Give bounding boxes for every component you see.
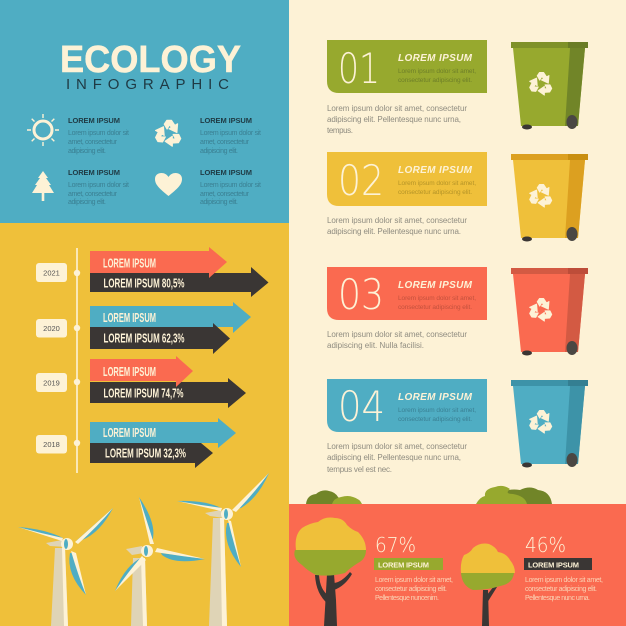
subtitle: INFOGRAPHIC — [66, 76, 229, 93]
paragraph 04: adipiscing elit. Pellentesque nunc urna, — [327, 453, 461, 462]
text block: recycle: amet, consectetur — [200, 139, 250, 146]
stat 67%: consectetur adipiscing elit. — [375, 586, 447, 593]
icon: tree — [32, 171, 54, 201]
bin green — [511, 42, 588, 130]
stat 67%: 67% — [375, 533, 416, 557]
banner 01: consectetur adipiscing elit. — [398, 77, 472, 84]
banner 01 — [327, 40, 487, 93]
paragraph 04: Lorem ipsum dolor sit amet, consectetur — [327, 442, 467, 451]
banner 04: Lorem ipsum dolor sit amet, — [398, 407, 476, 414]
arrows 2020: LOREM IPSUM — [103, 310, 156, 325]
text block: tree: amet, consectetur — [68, 191, 118, 198]
text block: sun: LOREM IPSUM — [68, 116, 120, 125]
bin yellow — [511, 154, 588, 242]
paragraph 01: Lorem ipsum dolor sit amet, consectetur — [327, 104, 467, 113]
stat 46%: 46% — [525, 533, 566, 557]
bin blue — [511, 380, 588, 468]
panel: yellow timeline background — [0, 223, 289, 626]
stat 67% — [374, 533, 453, 602]
year tag 2019: 2019 — [43, 378, 60, 388]
banner 01: 01 — [338, 44, 380, 93]
panel: cream background — [289, 0, 626, 504]
banner 02 — [327, 152, 487, 206]
wind turbine middle — [115, 497, 205, 626]
stat 46% — [524, 533, 603, 602]
paragraph 04: tempus vel est nec. — [327, 465, 392, 474]
arrows 2021 — [90, 247, 268, 297]
arrows 2020: LOREM IPSUM 62,3% — [104, 330, 185, 346]
title: ECOLOGY — [60, 39, 241, 81]
panel: red bottom — [289, 504, 626, 626]
stat 67%: LOREM IPSUM — [378, 560, 429, 570]
year tag 2020 — [36, 319, 67, 338]
arrows 2020 — [90, 302, 251, 354]
paragraph 01 — [327, 104, 467, 135]
text block: sun — [68, 116, 129, 155]
stat 67%: Lorem ipsum dolor sit amet, — [375, 577, 453, 584]
paragraph 02 — [327, 216, 467, 236]
year tag 2019 — [36, 373, 67, 392]
tree left — [294, 518, 366, 626]
timeline axis — [74, 248, 80, 473]
year tag 2020: 2020 — [43, 324, 60, 333]
banner 02: 02 — [338, 156, 384, 205]
stat 46%: consectetur adipiscing elit. — [525, 586, 597, 593]
banner 02: LOREM IPSUM — [398, 165, 473, 176]
text block: heart — [200, 168, 261, 206]
banner 02: consectetur adipiscing elit. — [398, 189, 472, 196]
wind turbine right — [177, 473, 269, 626]
paragraph 04 — [327, 442, 467, 474]
text block: heart: Lorem ipsum dolor sit — [200, 182, 261, 189]
stat 46%: Lorem ipsum dolor sit amet, — [525, 577, 603, 584]
banner 01: LOREM IPSUM — [398, 53, 473, 64]
paragraph 01: tempus. — [327, 126, 353, 135]
text block: recycle: Lorem ipsum dolor sit — [200, 130, 261, 137]
text block: sun: adipiscing elit. — [68, 148, 106, 155]
arrows 2019: LOREM IPSUM — [103, 364, 156, 379]
banner 03: Lorem ipsum dolor sit amet, — [398, 295, 476, 302]
text block: sun: Lorem ipsum dolor sit — [68, 130, 129, 137]
arrows 2019: LOREM IPSUM 74,7% — [104, 386, 184, 400]
year tag 2021: 2021 — [43, 268, 60, 278]
text block: recycle — [200, 116, 261, 155]
paragraph 02: adipiscing elit. Pellentesque nunc urna. — [327, 227, 461, 236]
banner 03: consectetur adipiscing elit. — [398, 304, 472, 311]
arrows 2018: LOREM IPSUM 32,3% — [105, 446, 186, 460]
text block: recycle: adipiscing elit. — [200, 148, 238, 155]
text block: tree: LOREM IPSUM — [68, 168, 120, 177]
wind turbine left — [18, 508, 113, 626]
bin red — [511, 268, 588, 356]
banner 04: 04 — [338, 382, 385, 431]
arrows 2021: LOREM IPSUM 80,5% — [104, 276, 185, 290]
year tag 2018: 2018 — [43, 440, 60, 449]
panel: blue header — [0, 0, 289, 223]
arrows 2018 — [90, 418, 236, 468]
banner 04: consectetur adipiscing elit. — [398, 416, 472, 423]
text block: tree: adipiscing elit. — [68, 199, 106, 206]
stat 67%: Pellentesque nuncenim. — [375, 595, 439, 602]
icon: heart — [155, 173, 182, 196]
stat 46%: LOREM IPSUM — [528, 560, 579, 570]
text block: tree — [68, 168, 129, 206]
year tag 2021 — [36, 263, 67, 282]
icon: sun — [27, 114, 59, 146]
banner 04: LOREM IPSUM — [398, 392, 473, 403]
arrows 2018: LOREM IPSUM — [103, 425, 156, 440]
year tag 2018 — [36, 435, 67, 454]
bush left — [306, 490, 362, 504]
arrows 2019 — [90, 356, 246, 408]
text block: sun: amet, consectetur — [68, 139, 118, 146]
banner 03: LOREM IPSUM — [398, 280, 473, 291]
arrows 2021: LOREM IPSUM — [103, 256, 156, 270]
banner 02: Lorem ipsum dolor sit amet, — [398, 180, 476, 187]
paragraph 01: adipiscing elit. Pellentesque nunc urna, — [327, 115, 461, 124]
text block: recycle: LOREM IPSUM — [200, 116, 252, 125]
text block: heart: amet, consectetur — [200, 191, 250, 198]
banner 03: 03 — [338, 270, 384, 319]
banner 01: Lorem ipsum dolor sit amet, — [398, 68, 476, 75]
paragraph 03: adipiscing elit. Nulla facilisi. — [327, 341, 424, 350]
stat 46%: Pellentesque nunc urna. — [525, 595, 590, 602]
icon: recycle — [153, 120, 182, 148]
text block: tree: Lorem ipsum dolor sit — [68, 182, 129, 189]
banner 04 — [327, 379, 487, 432]
text block: heart: adipiscing elit. — [200, 199, 238, 206]
paragraph 02: Lorem ipsum dolor sit amet, consectetur — [327, 216, 467, 225]
banner 03 — [327, 267, 487, 320]
tree right — [461, 544, 515, 626]
paragraph 03: Lorem ipsum dolor sit amet, consectetur — [327, 330, 467, 339]
text block: heart: LOREM IPSUM — [200, 168, 252, 177]
paragraph 03 — [327, 330, 467, 350]
bush right — [476, 486, 552, 504]
